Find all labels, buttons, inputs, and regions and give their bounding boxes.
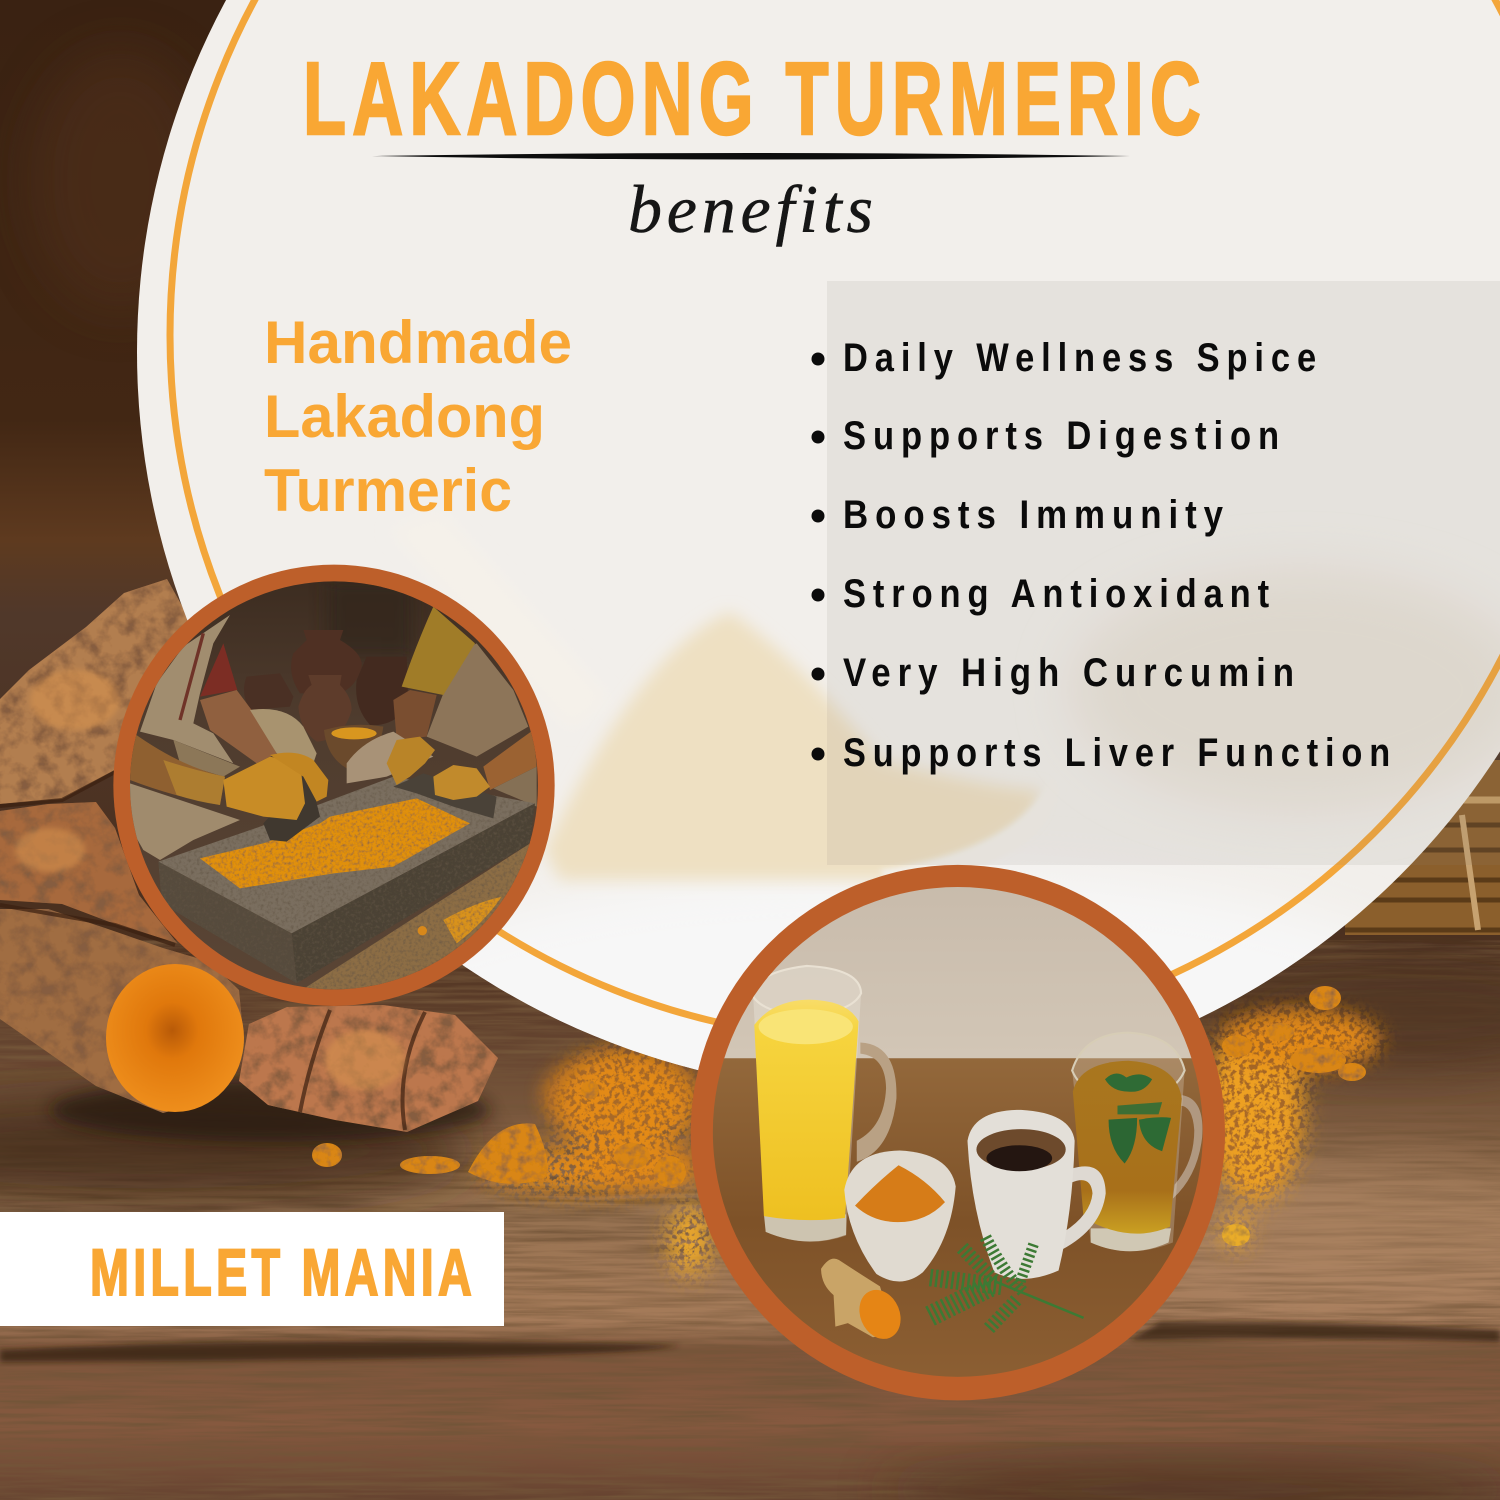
brand label (0, 1212, 504, 1326)
tea glass with mint (1072, 1033, 1202, 1251)
heading: handmade lakadong turmeric (264, 309, 572, 524)
title underline swash (372, 153, 1130, 160)
stone slab (158, 777, 535, 983)
heading: handmade lakadong turmeric: Turmeric (264, 457, 512, 524)
benefit: boosts immunity: Boosts Immunity (843, 493, 1230, 537)
dill sprig (930, 1237, 1084, 1328)
cut face of turmeric root (106, 964, 244, 1112)
subtitle: benefits (628, 171, 873, 247)
tall glass of golden milk (753, 966, 896, 1242)
basket in background (1345, 760, 1500, 935)
stone pestles and hands (223, 737, 497, 842)
grey panel behind benefit list (827, 281, 1500, 865)
fresh turmeric root (821, 1258, 901, 1339)
left woman (130, 615, 317, 860)
benefit: strong antioxidant: Strong Antioxidant (843, 572, 1276, 616)
heading: handmade lakadong turmeric: Handmade (264, 309, 572, 376)
photo circle: turmeric drinks (680, 865, 1240, 1400)
floor (306, 844, 530, 990)
brand label: MILLET MANIA (90, 1235, 476, 1309)
thin orange ring (170, 0, 1500, 1040)
scattered turmeric powder (312, 986, 1380, 1276)
benefit: daily wellness spice: Daily Wellness Spice (843, 336, 1323, 380)
photo circle: women grinding turmeric (113, 565, 555, 1006)
benefits list (812, 336, 1397, 775)
benefit: very high curcumin: Very High Curcumin (843, 651, 1301, 695)
turmeric rhizomes (0, 579, 498, 1142)
small bowl of powder (324, 725, 383, 768)
benefit: supports digestion: Supports Digestion (843, 414, 1286, 458)
large translucent circle panel (137, 0, 1500, 1170)
powder on slab and floor (200, 798, 502, 943)
bowl of turmeric powder (844, 1151, 956, 1282)
heading: handmade lakadong turmeric: Lakadong (264, 383, 545, 450)
clay pots (244, 630, 408, 742)
white coffee mug (967, 1110, 1106, 1279)
right woman (347, 607, 537, 807)
benefit: supports liver function: Supports Liver Function (843, 731, 1397, 775)
